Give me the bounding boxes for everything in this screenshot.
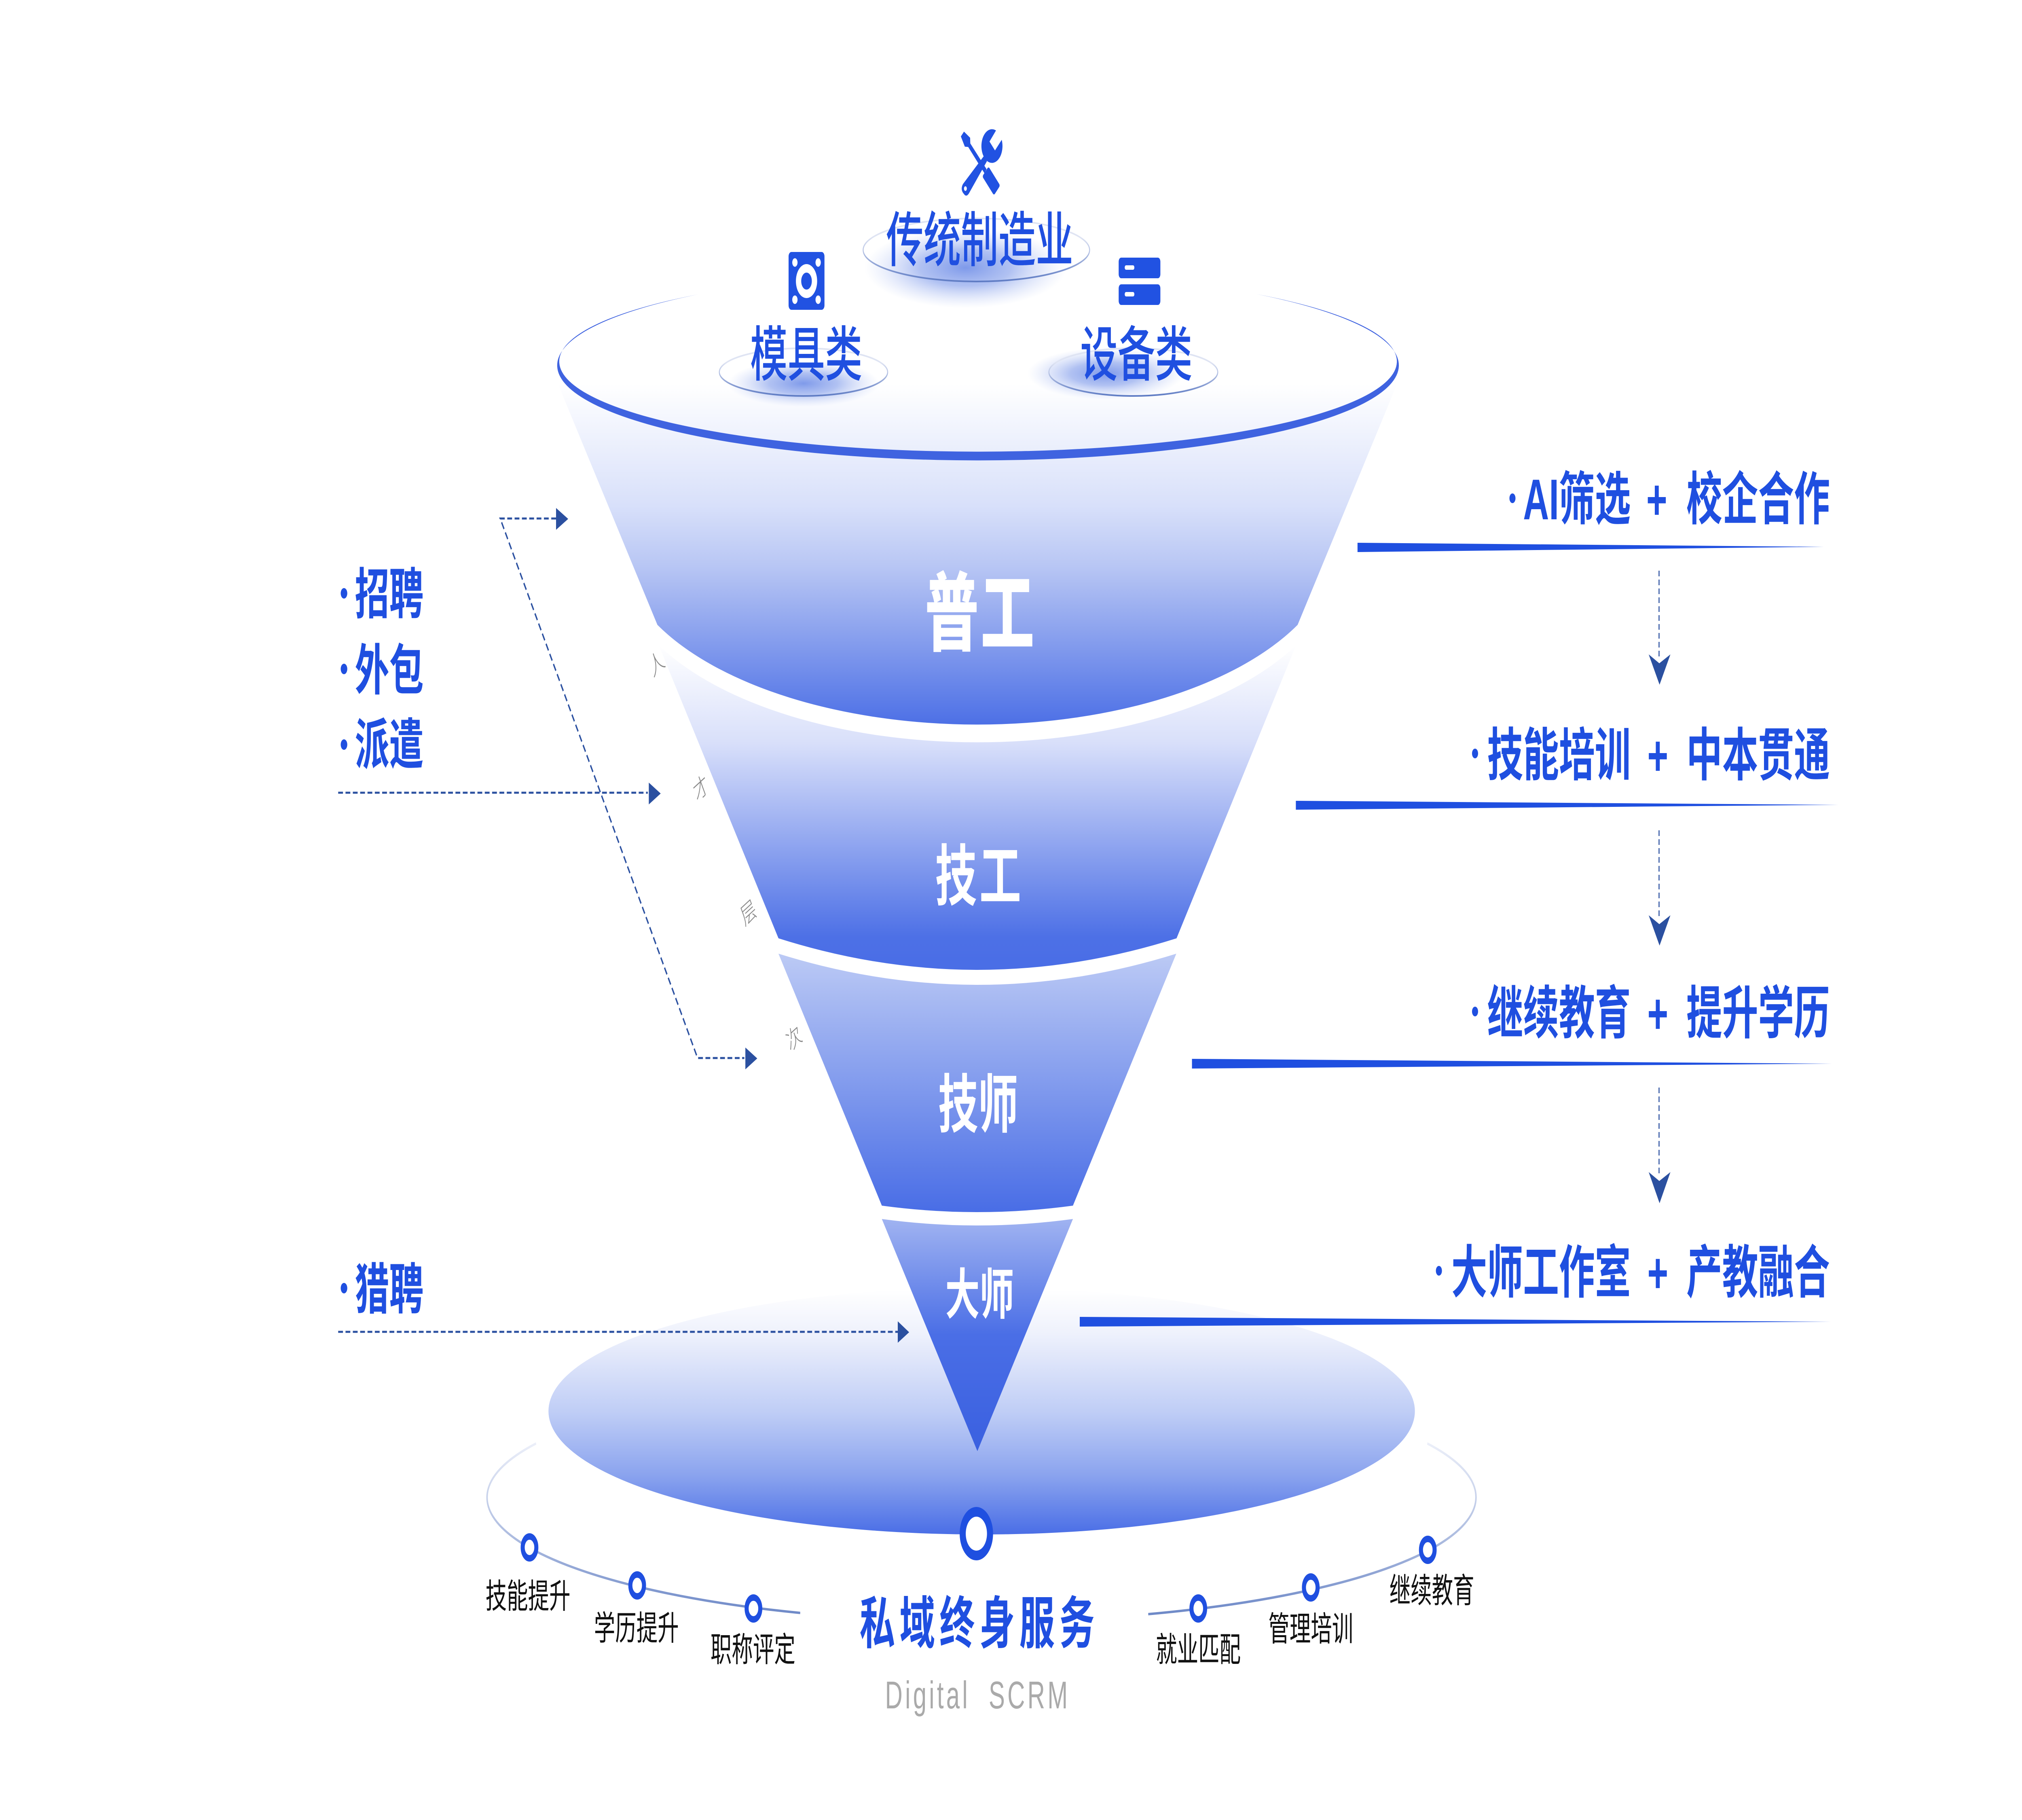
left text: 招聘 外包 派遣: 外包: [355, 640, 423, 702]
arrow: to 技工: [338, 783, 661, 804]
right row: 技能培训 + 中本贯通: +: [1647, 724, 1668, 788]
icon: server: [1119, 258, 1160, 305]
right row: 大师工作室 + 产教融合: 产教融合: [1686, 1241, 1830, 1305]
right row: 技能培训 + 中本贯通: [1296, 724, 1838, 810]
tier: 普工 body: [558, 384, 1397, 724]
right row: 继续教育 + 提升学历: +: [1647, 982, 1668, 1046]
left text: 招聘 外包 派遣: 派遣: [355, 715, 423, 776]
right row: 技能培训 + 中本贯通: 中本贯通: [1686, 724, 1830, 788]
right row: 大师工作室 + 产教融合: [1080, 1241, 1831, 1327]
arrow: to 大师: [338, 1321, 909, 1343]
pad: 设备类: [1028, 348, 1218, 400]
service nodes left: [486, 1536, 795, 1669]
right row: 大师工作室 + 产教融合: 大师工作室: [1451, 1241, 1631, 1305]
side caption: 人才层次: 次: [783, 1020, 805, 1056]
pad: 模具类: [719, 348, 888, 407]
arrow: down 3: [1649, 1088, 1671, 1203]
service nodes right: 管理培训: [1268, 1610, 1353, 1648]
left text: 猎聘: 猎聘: [355, 1259, 423, 1321]
tier: 技工 body: [659, 645, 1296, 970]
title: 私域终身服务: 私域终身服务: [860, 1592, 1099, 1655]
orbit line behind the base: [487, 1443, 1476, 1614]
base platform ellipse: [548, 1288, 1415, 1534]
side caption: 人才层次: 人: [646, 646, 668, 681]
service nodes right: 就业匹配: [1156, 1631, 1241, 1669]
heading: 模具类: 模具类: [750, 322, 862, 389]
pad: 传统制造业: [863, 218, 1089, 308]
side caption: 人才层次: 才: [690, 770, 712, 806]
service nodes left: 职称评定: [711, 1631, 795, 1669]
service nodes right: [1156, 1539, 1474, 1669]
heading: 设备类: 设备类: [1080, 322, 1193, 389]
right row: AI筛选 + 校企合作: 校企合作: [1686, 468, 1830, 532]
tier: 大师 body: [882, 1219, 1073, 1451]
heading: 传统制造业: 传统制造业: [886, 207, 1073, 274]
center node: [963, 1512, 990, 1555]
funnel top rim: [557, 294, 1399, 460]
right row: 大师工作室 + 产教融合: +: [1647, 1241, 1668, 1305]
right row: AI筛选 + 校企合作: AI筛选: [1523, 468, 1631, 532]
service nodes left: 技能提升: [486, 1577, 571, 1615]
arrow: down 1: [1649, 571, 1671, 685]
icon: tools: [961, 129, 1003, 196]
service nodes right: 继续教育: [1390, 1572, 1474, 1610]
arrow: branch to 普工 and 技师: [500, 508, 757, 1069]
right row: 继续教育 + 提升学历: 继续教育: [1487, 982, 1631, 1046]
right row: 继续教育 + 提升学历: [1192, 982, 1832, 1069]
label: 普工: 普工: [925, 567, 1036, 662]
label: 技师: 技师: [938, 1069, 1018, 1141]
tier: 技师 body: [778, 954, 1176, 1212]
label: 技工: 技工: [935, 840, 1024, 914]
right row: 继续教育 + 提升学历: 提升学历: [1686, 982, 1830, 1046]
arrow: down 2: [1649, 830, 1671, 946]
left text: 招聘 外包 派遣: [341, 564, 423, 776]
label: 大师: 大师: [945, 1265, 1014, 1326]
right row: AI筛选 + 校企合作: [1358, 468, 1830, 552]
left text: 招聘 外包 派遣: 招聘: [355, 564, 423, 626]
icon: mold: [789, 252, 825, 310]
side caption: 人才层次: [646, 646, 805, 1056]
right row: 技能培训 + 中本贯通: 技能培训: [1487, 724, 1631, 788]
right row: AI筛选 + 校企合作: +: [1646, 468, 1667, 532]
side caption: 人才层次: 层: [738, 895, 759, 931]
subtitle: Digital SCRM: Digital SCRM: [885, 1674, 1070, 1716]
service nodes left: 学历提升: [594, 1609, 679, 1647]
